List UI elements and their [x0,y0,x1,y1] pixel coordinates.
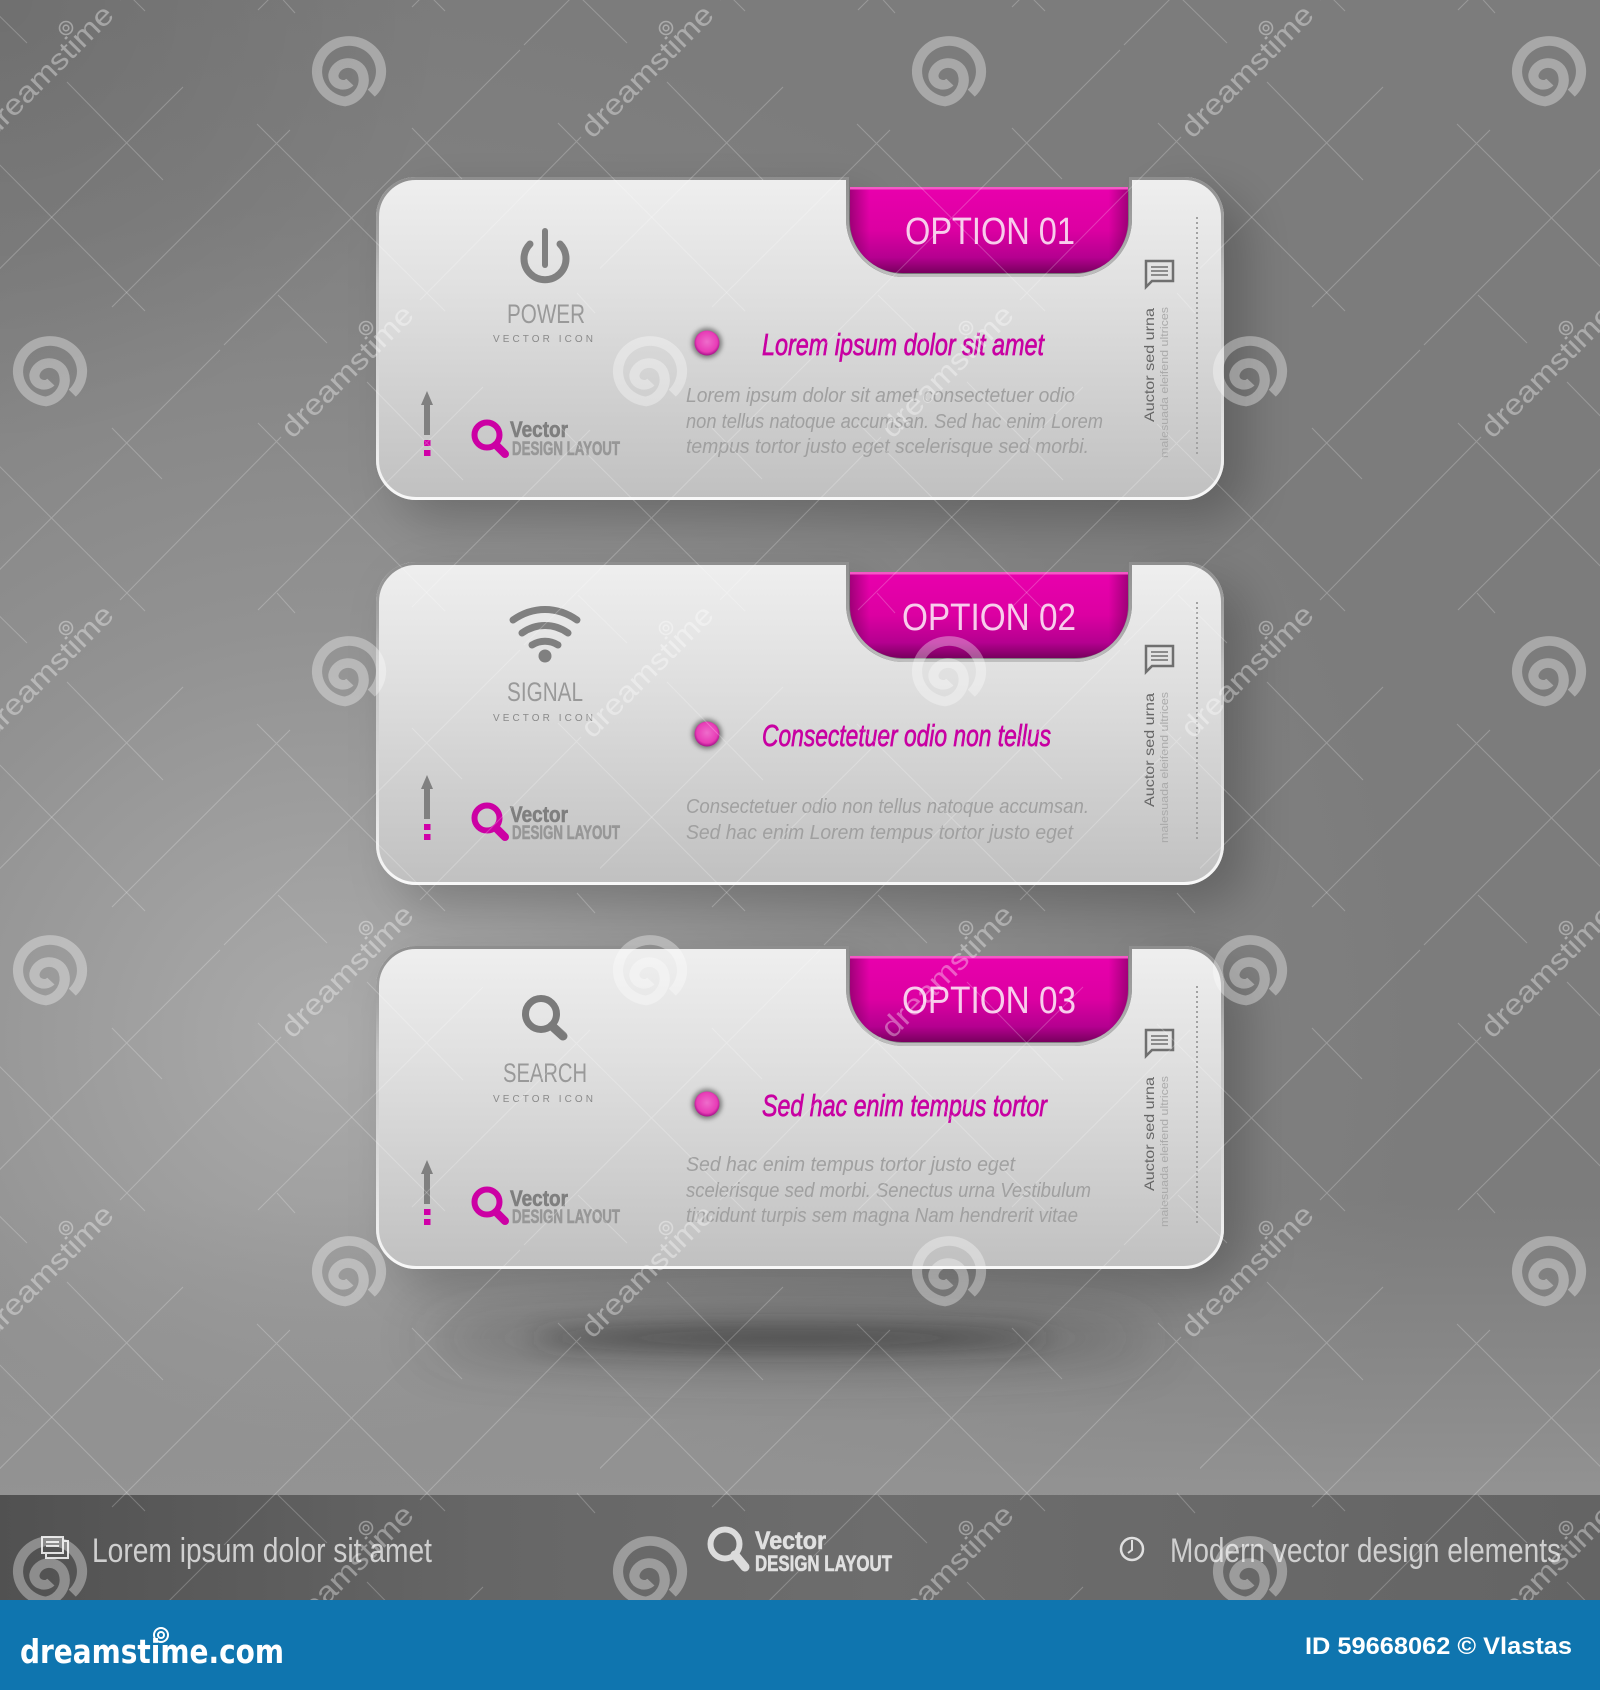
footer logo: DESIGN LAYOUT [755,1551,892,1576]
side text [1141,986,1197,1227]
watermark: dreamstime text: dreamstime [1175,1199,1320,1344]
icon label: power: VECTOR ICON [493,334,593,345]
icon: power [524,231,566,280]
floor shadow [420,1314,1160,1362]
side text: malesuada eleifend ultrices [1159,306,1171,458]
icon: clock [1121,1538,1143,1560]
bullet [692,1089,722,1119]
watermark: dreamstime text: dreamstime [275,899,420,1044]
logo: vector design layout: Vector [510,1186,568,1211]
body text [686,1154,1091,1227]
icon label: signal [493,677,593,724]
heading: Lorem ipsum dolor sit amet [762,327,1045,362]
icon: speech bubble [1146,646,1173,672]
watermark: dreamstime text: dreamstime [575,599,720,744]
side text: Auctor sed urna [1141,1077,1157,1191]
arrow indicator [421,391,433,456]
icon label: signal: SIGNAL [507,677,583,707]
watermark: dreamstime text: dreamstime [875,1499,1020,1644]
watermark: dreamstime text: dreamstime [1175,599,1320,744]
watermark: dreamstime text: dreamstime [575,1199,720,1344]
body text: non tellus natoque accumsan. Sed hac enim Lorem [686,411,1103,433]
brand spiral mark [154,1628,168,1642]
watermark: dreamstime text: dreamstime [1175,0,1320,144]
side text: malesuada eleifend ultrices [1159,1075,1171,1227]
tab: option 03 [850,956,1128,1042]
body text: Consectetuer odio non tellus natoque accumsan. [686,796,1089,818]
arrow indicator [421,775,433,840]
side text: Auctor sed urna [1141,693,1157,807]
icon label: power [493,299,593,345]
icon label: signal: VECTOR ICON [493,713,593,724]
heading: Sed hac enim tempus tortor [762,1088,1048,1123]
side text: malesuada eleifend ultrices [1159,691,1171,843]
icon label: search [493,1058,593,1105]
logo: vector design layout [474,1186,620,1228]
footer logo [710,1527,892,1576]
tab: option 01 [850,187,1128,273]
watermark: dreamstime text: dreamstime [275,299,420,444]
body text: scelerisque sed morbi. Senectus urna Vestibulum [686,1180,1091,1202]
icon: search [526,998,563,1036]
logo: vector design layout: DESIGN LAYOUT [512,823,620,844]
body text: tempus tortor justo eget scelerisque sed morbi. [686,436,1089,458]
icon: speech bubble [1146,1030,1173,1056]
panel: option 02 [376,562,1224,885]
body text: Sed hac enim tempus tortor justo eget [686,1154,1016,1176]
footer text left: Lorem ipsum dolor sit amet [92,1532,432,1570]
tab: option 03: OPTION 03 [902,980,1076,1022]
heading: Consectetuer odio non tellus [762,718,1051,753]
icon label: search: SEARCH [503,1058,587,1088]
footer strip [0,1495,1600,1600]
tab: option 02 [850,572,1128,658]
icon: speech bubble [1146,261,1173,287]
watermark: dreamstime text: dreamstime [275,1499,420,1644]
body text: Sed hac enim Lorem tempus tortor justo eget [686,822,1074,844]
logo: vector design layout [474,802,620,844]
watermark: dreamstime text: dreamstime [575,0,720,144]
footer logo: Vector [755,1527,826,1555]
icon label: search: VECTOR ICON [493,1094,593,1105]
logo: vector design layout: Vector [510,802,568,827]
panel: option 03 [376,946,1224,1269]
body text [686,385,1103,458]
side text [1141,602,1197,843]
tab: option 02: OPTION 02 [902,597,1076,639]
tab: option 01: OPTION 01 [905,211,1075,253]
logo: vector design layout: Vector [510,417,568,442]
arrow indicator [421,1160,433,1225]
panel: option 01 [376,177,1224,500]
body text [686,796,1089,844]
body text: Lorem ipsum dolor sit amet consectetuer odio [686,385,1075,407]
brand: dreamstime.com [20,1632,284,1671]
bullet [692,719,722,749]
image id: ID 59668062 © Vlastas [1305,1633,1572,1660]
icon label: power: POWER [507,299,585,329]
blue credit bar [0,1600,1600,1690]
logo: vector design layout: DESIGN LAYOUT [512,1207,620,1228]
watermark: dreamstime text: dreamstime [875,899,1020,1044]
body text: tincidunt turpis sem magna Nam hendrerit vitae [686,1205,1078,1227]
icon: document [42,1537,68,1558]
bullet [692,328,722,358]
watermark: dreamstime text: dreamstime [875,299,1020,444]
logo: vector design layout [474,417,620,460]
side text: Auctor sed urna [1141,308,1157,422]
side text [1141,217,1197,458]
logo: vector design layout: DESIGN LAYOUT [512,439,620,460]
icon: wifi signal [513,610,577,662]
